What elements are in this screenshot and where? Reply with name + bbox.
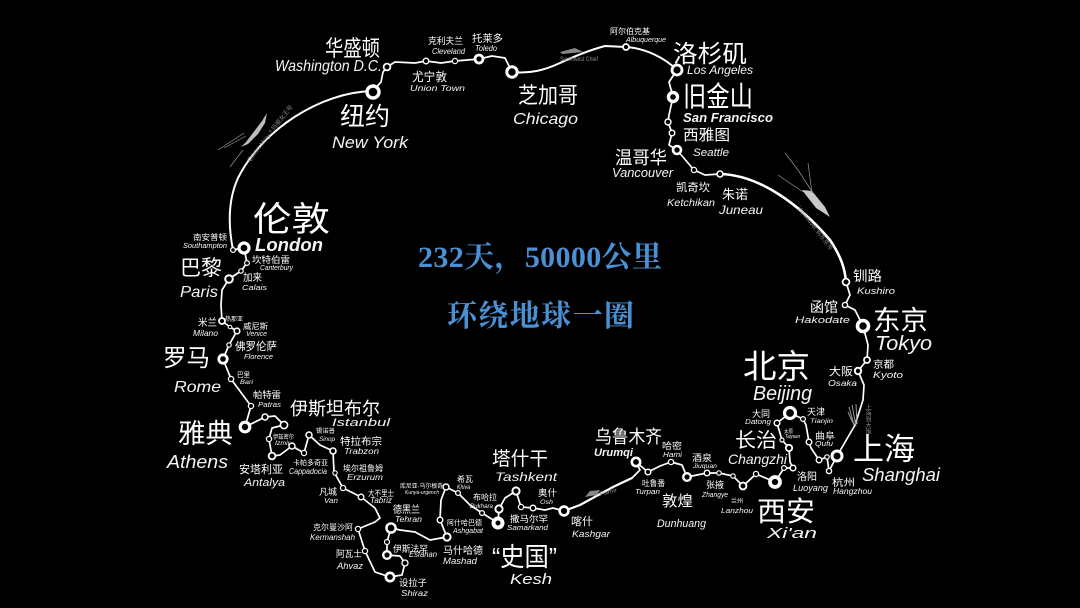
city: Sinop: 锡诺普: [316, 427, 335, 435]
city: Juneau: 朱诺: [722, 187, 748, 202]
city: Van: [319, 485, 346, 505]
city: Samarkand: [494, 513, 549, 532]
city: Paris: [180, 257, 233, 301]
city: Hami: [662, 440, 683, 465]
city: Milano: 米兰: [198, 316, 217, 329]
city: Dunhuang: 敦煌: [662, 493, 693, 510]
city: Paris: Paris: [180, 284, 218, 301]
city: Ahvaz: 阿瓦士: [336, 548, 362, 559]
city: Toledo: [472, 32, 503, 63]
city: Florence: Florence: [244, 354, 273, 361]
city: Union Town: 尤宁敦: [412, 69, 447, 84]
city: Kushiro: 钏路: [853, 268, 882, 284]
city: Izmir: Izmir: [275, 441, 291, 447]
city: Calais: [242, 272, 268, 292]
icon: ship on the Atlantic: [218, 103, 294, 167]
city: Turpan: Turpan: [635, 489, 660, 496]
city: Milano: [193, 316, 225, 338]
city: Southampton: 南安普顿: [193, 232, 227, 242]
city: Cleveland: 克利夫兰: [428, 35, 463, 46]
city: Calais: 加来: [243, 272, 262, 284]
city: Antalya: [239, 453, 285, 489]
icon: ship on the Pacific: [778, 153, 835, 252]
city: Sinop: [306, 427, 336, 443]
city: Jiuquan: 酒泉: [692, 452, 712, 463]
city: Kyoto: [864, 357, 903, 380]
city: New York: New York: [332, 133, 410, 152]
city: Patras: Patras: [258, 402, 282, 409]
city: Bari: 巴里: [237, 371, 250, 379]
city: Trabzon: [330, 435, 382, 456]
city: Izmir: [266, 433, 294, 447]
city: Jiuquan: [692, 452, 718, 476]
city: Lanzhou: [721, 483, 753, 515]
city: Erzurum: [333, 463, 383, 482]
city: Hangzhou: [826, 468, 873, 496]
city: Seattle: [673, 127, 730, 159]
city: Los Angeles: 洛杉矶: [673, 41, 747, 68]
city: Hakodate: [795, 299, 850, 325]
city: Osh: 奥什: [538, 487, 557, 498]
city: Kunya-Urgench: [400, 482, 449, 496]
city: Luoyang: 洛阳: [797, 470, 817, 483]
city: Genoa: 热那亚: [225, 315, 243, 323]
city: Istanbul: Istanbul: [332, 417, 391, 429]
city: Kashgar: 喀什: [571, 515, 593, 528]
city: Calais: Calais: [242, 285, 268, 292]
city: Southampton: Southampton: [183, 243, 227, 250]
city: Washington D.C.: 华盛顿: [325, 36, 380, 61]
city: Ketchikan: 凯奇坎: [676, 181, 710, 194]
city: Esfahan: 伊斯法罕: [393, 543, 428, 554]
city: Tabriz: [358, 488, 394, 505]
city: Kushiro: Kushiro: [857, 286, 895, 296]
city: New York: 纽约: [340, 103, 390, 131]
city: Shiraz: 设拉子: [399, 577, 427, 588]
icon: Pamir road sketch: Pamir: [599, 488, 618, 498]
city: Florence: [227, 339, 277, 361]
city: Tianjin: 天津: [807, 407, 825, 417]
city: Kyoto: 京都: [873, 358, 894, 371]
city: Seattle: Seattle: [693, 147, 729, 159]
city: Canterbury: 坎特伯雷: [252, 254, 290, 265]
city: Taiyuan: Taiyuan: [785, 434, 800, 440]
city: Toledo: 托莱多: [472, 32, 503, 45]
city: Ashgabat: 阿什哈巴德: [447, 518, 482, 527]
city: Izmir: 伊兹密尔: [273, 433, 294, 441]
city: Tehran: 德黑兰: [393, 503, 420, 516]
city: Urumqi: [594, 427, 662, 466]
city: Kashgar: [560, 507, 611, 539]
city: Athens: Athens: [166, 452, 228, 472]
city: Seattle: 西雅图: [683, 127, 730, 144]
unnamed route stops: [228, 58, 829, 566]
city: Changzhi: Changzhi: [728, 451, 788, 467]
icon: ferry sketch near Shanghai: 上海到大阪: [864, 403, 871, 435]
city: Urumqi: Urumqi: [594, 447, 634, 459]
city: Tashkent: 塔什干: [492, 448, 548, 470]
city: Bukhara: Bukhara: [470, 504, 494, 510]
city: Beijing: [743, 348, 812, 418]
city: Tashkent: Tashkent: [495, 470, 558, 484]
city: Lanzhou: Lanzhou: [721, 508, 753, 515]
city: Hami: Hami: [663, 452, 683, 459]
title: 环绕地球一圈: [447, 300, 634, 333]
city: Van: 凡城: [319, 487, 337, 497]
city: Union Town: [410, 69, 466, 93]
city: San Francisco: San Francisco: [683, 110, 773, 125]
city: Erzurum: Erzurum: [347, 473, 383, 482]
city: Cleveland: Cleveland: [432, 47, 466, 56]
city: Chicago: [507, 67, 578, 128]
city: Qufu: 曲阜: [815, 430, 835, 441]
city: Cappadocia: Cappadocia: [289, 467, 327, 476]
city: Mashhad: [443, 533, 483, 566]
city: Rome: 罗马: [163, 345, 210, 372]
icon: Southwest Chief train: Southwest Chief: [560, 57, 598, 63]
city: Dunhuang: Dunhuang: [657, 518, 707, 530]
city: Dunhuang: [657, 473, 707, 530]
city: Turpan: [635, 469, 665, 496]
city: Beijing: 北京: [743, 348, 810, 385]
city: Tashkent: [492, 448, 558, 495]
title: 232天，50000公里: [418, 241, 662, 275]
city: Kunya-Urgench: Kunya-urgench: [405, 490, 439, 496]
city: Kermanshah: 克尔曼沙阿: [313, 522, 353, 532]
city: Shanghai: [832, 432, 941, 485]
city: Los Angeles: Los Angeles: [687, 63, 753, 77]
city: Albuquerque: Albuquerque: [625, 37, 666, 44]
city: San Francisco: [668, 81, 773, 125]
city: Kesh: Kesh: [510, 571, 552, 588]
city: Ahvaz: Ahvaz: [336, 561, 364, 571]
city: Antalya: Antalya: [243, 477, 285, 489]
city: Toledo: Toledo: [475, 44, 498, 53]
city: Taiyuan: [780, 428, 800, 442]
city: Bari: [228, 371, 254, 386]
city: Osh: [538, 487, 557, 506]
city: Vancouver: 温哥华: [615, 148, 667, 168]
city: Changzhi: 长治: [735, 429, 777, 452]
city: Kushiro: [843, 268, 895, 296]
city: Shiraz: Shiraz: [401, 589, 428, 598]
city: Datong: [745, 408, 780, 426]
city: Xi'an: 西安: [757, 496, 815, 527]
city: Istanbul: [290, 399, 391, 429]
city: Patras: [248, 389, 282, 409]
city: Cappadocia: 卡帕多奇亚: [293, 458, 328, 467]
city: Tianjin: [801, 407, 833, 425]
city: Osh: Osh: [540, 500, 554, 506]
city: Tianjin: Tianjin: [810, 418, 833, 425]
city: Bukhara: [470, 492, 497, 515]
city: Bari: Bari: [240, 380, 254, 386]
city: Canterbury: [245, 254, 293, 272]
city: Istanbul: 伊斯坦布尔: [290, 399, 380, 419]
city: Zhangye: Zhangye: [701, 492, 728, 499]
city: Esfahan: Esfahan: [409, 550, 438, 559]
city: Paris: 巴黎: [180, 257, 222, 280]
city: Albuquerque: [610, 26, 666, 50]
city: Bukhara: 布哈拉: [473, 492, 497, 502]
city: Kermanshah: [310, 522, 361, 542]
route line around the globe: [221, 46, 868, 577]
city: Hakodate: 函馆: [810, 299, 838, 315]
city: Florence: 佛罗伦萨: [235, 339, 277, 353]
city: Samarkand: 撒马尔罕: [510, 513, 548, 524]
city: Washington D.C.: Washington D.C.: [275, 58, 382, 75]
city: Vancouver: [612, 148, 674, 180]
city: Xi'an: Xi'an: [765, 525, 817, 542]
icon: ship on the Pacific: Vancouver 到东京号: [795, 204, 835, 252]
city: Venice: Venice: [246, 331, 267, 338]
city: Antalya: 安塔利亚: [239, 462, 283, 476]
city: Ketchikan: Ketchikan: [667, 198, 715, 209]
city: Mashhad: 马什哈德: [443, 544, 483, 557]
city: Hangzhou: Hangzhou: [833, 487, 873, 496]
city: Osaka: [828, 364, 861, 388]
city: Venice: [234, 321, 268, 338]
city: Chicago: Chicago: [513, 111, 578, 128]
city: Athens: 雅典: [178, 419, 233, 449]
city: Hami: 哈密: [662, 440, 682, 451]
city: Qufu: [806, 430, 835, 448]
title: [418, 241, 662, 333]
city: Ashgabat: [437, 517, 484, 535]
city: Van: Van: [324, 498, 338, 505]
city: Kunya-Urgench: 库尼亚·乌尔根奇: [400, 482, 443, 490]
city: Vancouver: Vancouver: [612, 165, 674, 180]
city: Shanghai: Shanghai: [862, 465, 941, 485]
city: Datong: 大同: [752, 408, 770, 419]
city: Southampton: [183, 232, 235, 252]
city: Esfahan: [383, 543, 438, 559]
city: Erzurum: 埃尔祖鲁姆: [343, 463, 383, 473]
city: Los Angeles: [672, 41, 753, 77]
city: Ketchikan: [667, 167, 715, 209]
city: Osaka: Osaka: [828, 379, 858, 388]
city: Lanzhou: 兰州: [731, 497, 743, 505]
city: Mashhad: Mashad: [443, 556, 478, 566]
city: Samarkand: Samarkand: [507, 525, 549, 532]
city: Kesh: “史国”: [492, 542, 557, 572]
city: Turpan: 吐鲁番: [642, 478, 665, 488]
city: Zhangye: 张掖: [706, 479, 724, 490]
city: Khiva: [456, 474, 473, 495]
city: London: 伦敦: [253, 201, 330, 239]
icon: Southwest Chief train: [560, 48, 598, 63]
city: Tehran: Tehran: [395, 515, 423, 524]
icon: ferry sketch near Shanghai: [848, 403, 871, 435]
city: Shanghai: 上海: [853, 432, 915, 467]
city: Urumqi: 乌鲁木齐: [595, 427, 662, 447]
city: Tokyo: 东京: [873, 306, 928, 336]
city: Juneau: [717, 171, 763, 217]
city: Ashgabat: Ashgabat: [452, 528, 484, 535]
city: Jiuquan: Jiuquan: [692, 464, 718, 470]
city: Chicago: 芝加哥: [518, 83, 578, 108]
city: Osaka: 大阪: [829, 364, 853, 378]
city: Tokyo: [858, 306, 932, 355]
city: Sinop: Sinop: [319, 437, 336, 443]
city: Trabzon: Trabzon: [344, 447, 380, 456]
city: Kyoto: Kyoto: [873, 370, 903, 380]
city: Cappadocia: [289, 458, 328, 476]
city: New York: [332, 86, 410, 152]
city: Kashgar: Kashgar: [572, 529, 611, 539]
city: Trabzon: 特拉布宗: [340, 435, 382, 448]
city: Venice: 威尼斯: [243, 321, 268, 331]
city: Changzhi: [728, 429, 788, 467]
city: Khiva: Khiva: [457, 485, 471, 491]
city: Ahvaz: [336, 548, 368, 571]
city: Union Town: Union Town: [410, 84, 466, 93]
city: Kesh: [492, 542, 557, 588]
icon: ship on the Atlantic: Queen Mary 2 玛丽女王号: [245, 103, 294, 163]
city: Luoyang: Luoyang: [793, 483, 828, 493]
city: Khiva: 希瓦: [457, 474, 473, 484]
city: Patras: 帕特雷: [253, 389, 281, 400]
city: Hakodate: Hakodate: [795, 315, 850, 325]
city: Milano: Milano: [193, 329, 219, 338]
city: Taiyuan: 太原: [784, 428, 793, 435]
city: Qufu: Qufu: [815, 441, 833, 448]
city: Shiraz: [386, 573, 428, 598]
city: Juneau: Juneau: [718, 203, 763, 217]
city: Rome: [163, 345, 227, 396]
city: Canterbury: Canterbury: [260, 265, 293, 272]
city: Luoyang: [790, 465, 828, 493]
city: Tabriz: 大不里士: [368, 488, 394, 498]
city: Hangzhou: 杭州: [832, 476, 855, 489]
city: Kermanshah: Kermanshah: [310, 533, 356, 542]
city: Washington D.C.: [275, 36, 390, 75]
city: Zhangye: [701, 479, 728, 499]
icon: Pamir road sketch: [585, 488, 618, 498]
city: San Francisco: 旧金山: [683, 81, 753, 112]
city: Tabriz: Tabriz: [370, 496, 392, 505]
city: Tehran: [393, 503, 423, 524]
city: Datong: Datong: [745, 419, 771, 426]
city: Athens: [166, 419, 250, 472]
city: London: London: [255, 235, 323, 255]
city: Albuquerque: 阿尔伯克基: [610, 26, 650, 36]
city: Cleveland: [423, 35, 466, 64]
city: Tokyo: Tokyo: [875, 333, 932, 355]
city: Beijing: Beijing: [753, 383, 812, 405]
city: London: [239, 201, 330, 255]
city: Xi'an: [757, 477, 817, 542]
city: Rome: Rome: [174, 379, 221, 396]
